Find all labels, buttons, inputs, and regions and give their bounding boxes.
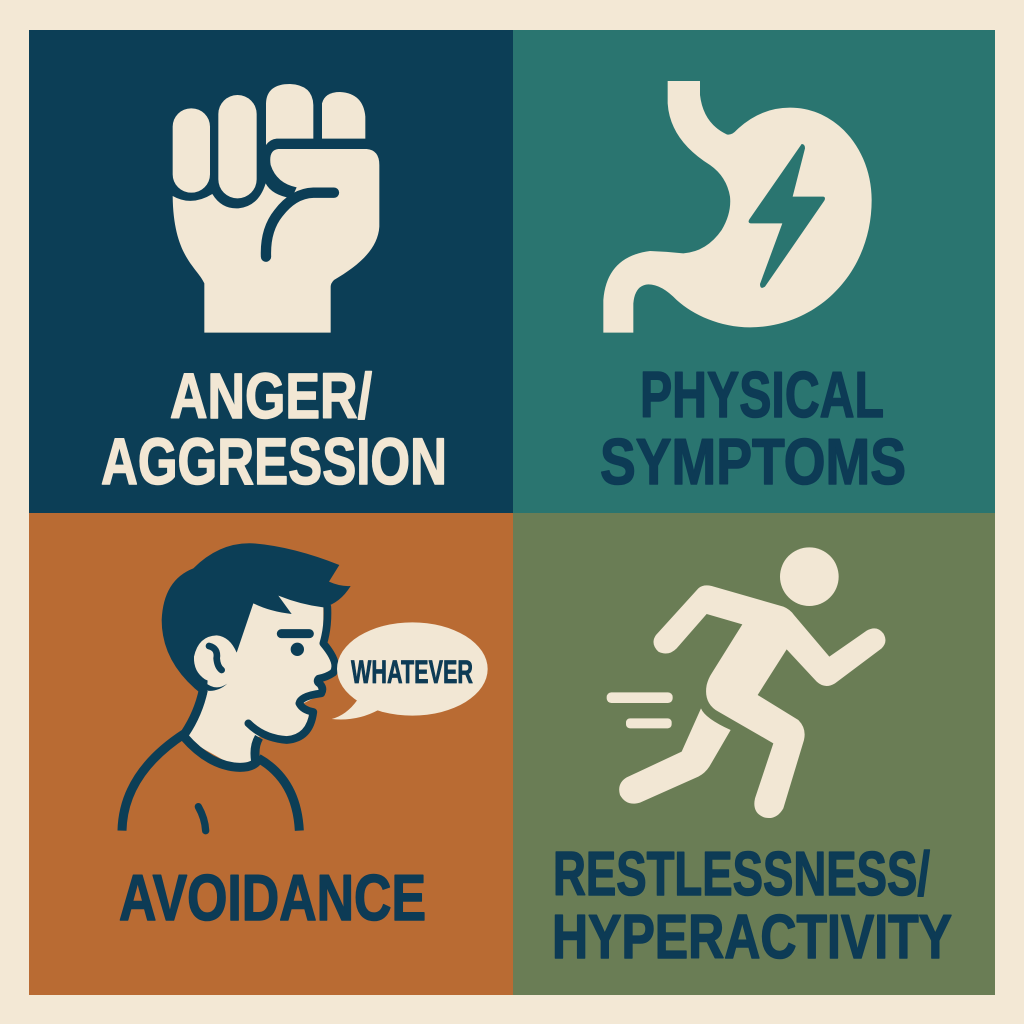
ear <box>194 635 237 683</box>
heading: anger: ANGER/ <box>170 360 372 432</box>
hair <box>162 543 351 695</box>
heading: physical: PHYSICAL <box>640 358 884 431</box>
panel: anger / aggression <box>29 30 513 513</box>
motion lines <box>607 692 673 728</box>
panel: avoidance <box>29 513 513 995</box>
icon: stomach with lightning bolt <box>603 81 872 333</box>
panel: physical symptoms <box>513 30 995 513</box>
face <box>182 593 333 766</box>
speech bubble text: WHATEVER <box>351 654 473 690</box>
panel: restlessness / hyperactivity <box>513 513 995 995</box>
icon: running figure <box>607 547 885 818</box>
face outline <box>248 607 335 740</box>
eyebrow and eye <box>281 620 309 647</box>
icon: person in profile with speech bubble <box>122 543 488 831</box>
speech bubble <box>332 622 488 719</box>
heading: symptoms: SYMPTOMS <box>600 425 906 498</box>
heading: aggression: AGGRESSION <box>101 424 447 498</box>
icon: raised fist <box>173 84 379 333</box>
heading: avoidance: AVOIDANCE <box>119 861 426 934</box>
neck and shoulders <box>122 690 299 831</box>
